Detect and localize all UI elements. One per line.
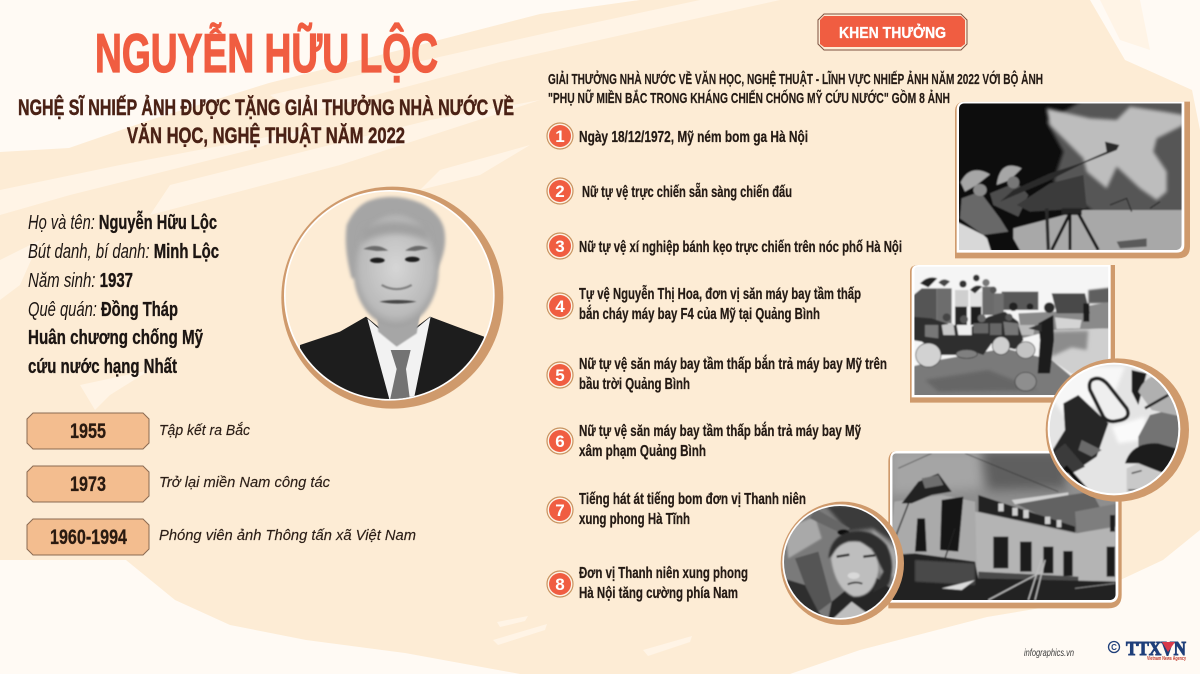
photo 1: anti-aircraft gun firing [955,100,1190,258]
lower operator [1124,442,1176,474]
photo 4: bombed building [888,450,1122,608]
item 7: 7 [555,501,565,520]
woman standing [1038,315,1054,373]
facade [975,512,1118,582]
soldiers [960,192,1008,235]
biography text block [28,210,219,378]
subtitle [18,95,514,148]
photo 2: militia group by the water [910,263,1115,403]
title: NGUYỄN HỮU LỘC [95,22,438,84]
logo: TTXVN: TTXVN [1126,638,1186,660]
item 4: bắn cháy máy bay F4 của Mỹ tại Quảng Bình [579,305,820,323]
awards heading [548,70,1043,107]
item 2 [547,178,792,204]
item 6: Nữ tự vệ săn máy bay tầm thấp bắn trả máy bay Mỹ [579,422,861,440]
awards heading: "PHỤ NỮ MIỀN BẮC TRONG KHÁNG CHIẾN CHỐNG MỸ CỨU NƯỚC" GỒM 8 ẢNH [548,89,950,107]
item 8: 8 [555,575,565,594]
item 4 [547,286,861,323]
item 5: 5 [555,366,565,385]
photo 5: young woman circle [781,502,904,625]
photo 3: camera operators circle [1045,358,1189,502]
face [831,541,878,597]
item 5: Nữ tự vệ săn máy bay tầm thấp bắn trả máy bay Mỹ trên [579,355,887,373]
item 7 [547,491,806,528]
item 3 [547,233,902,259]
subtitle: NGHỆ SĨ NHIẾP ẢNH ĐƯỢC TẶNG GIẢI THƯỞNG NHÀ NƯỚC VỀ [18,95,514,120]
item 7: xung phong Hà Tĩnh [579,511,690,528]
timeline: 1973: Trở lại miền Nam công tác [159,474,330,491]
gun [1000,142,1119,202]
rubble [890,553,1118,603]
item 4: 4 [555,297,565,316]
logo: TTXVN: Vietnam News Agency [1147,656,1186,662]
logo: TTXVN [1108,638,1186,662]
biography text block: Huân chương chống Mỹ [28,327,204,349]
item 4: Tự vệ Nguyễn Thị Hoa, đơn vị săn máy bay tầm thấp [579,286,861,303]
item 8 [547,565,748,602]
item 2: Nữ tự vệ trực chiến sẵn sàng chiến đấu [582,184,792,201]
biography text block: Quê quán: Đồng Tháp [28,299,178,321]
timeline: 1955 [27,413,250,449]
item 8: Đơn vị Thanh niên xung phong [579,565,748,582]
badge: khen thuong: KHEN THƯỞNG [839,23,946,42]
hair [828,531,892,593]
item 5: bầu trời Quảng Bình [579,376,690,393]
hair [346,197,445,278]
top operator [1137,411,1178,450]
face [353,213,439,327]
timeline: 1960-1994: 1960-1994 [50,526,127,549]
timeline: 1973 [27,466,330,502]
biography text block: cứu nước hạng Nhất [28,356,177,378]
badge: khen thuong [818,14,967,50]
item 1 [547,123,808,149]
timeline: 1973: 1973 [70,473,106,496]
item 3: Nữ tự vệ xí nghiệp bánh kẹo trực chiến trên nóc phố Hà Nội [579,239,902,256]
item 1: 1 [555,127,565,146]
item 1: Ngày 18/12/1972, Mỹ ném bom ga Hà Nội [579,129,808,146]
item 3: 3 [555,237,565,256]
item 6: 6 [555,432,565,451]
tie [390,350,411,400]
item 6: xâm phạm Quảng Bình [579,443,706,460]
facial features [363,246,428,304]
camera [1052,395,1108,473]
timeline: 1955: 1955 [70,420,106,443]
subtitle: VĂN HỌC, NGHỆ THUẬT NĂM 2022 [127,123,405,148]
logo: TTXVN: C [1111,643,1117,652]
portrait [281,187,503,412]
timeline: 1960-1994 [27,519,416,555]
ruined wing [890,495,977,565]
biography text block: Bút danh, bí danh: Minh Lộc [28,241,219,263]
basins [916,343,941,367]
item 6 [547,422,861,460]
timeline: 1960-1994: Phóng viên ảnh Thông tấn xã Việt Nam [159,527,416,544]
item 2: 2 [555,182,565,201]
timeline: 1955: Tập kết ra Bắc [159,422,250,439]
biography text block: Họ và tên: Nguyễn Hữu Lộc [28,210,217,234]
standing group [912,288,937,323]
biography text block: Năm sinh: 1937 [28,270,133,292]
shirt [367,317,431,402]
seated row [912,312,1023,355]
item 7: Tiếng hát át tiếng bom đơn vị Thanh niên [579,491,806,508]
source credit: infographics.vn [1024,648,1074,659]
roof [1017,492,1100,532]
jacket [300,316,484,399]
camera handle [1089,378,1128,421]
item 8: Hà Nội tăng cường phía Nam [579,585,738,602]
item 5 [547,355,887,393]
